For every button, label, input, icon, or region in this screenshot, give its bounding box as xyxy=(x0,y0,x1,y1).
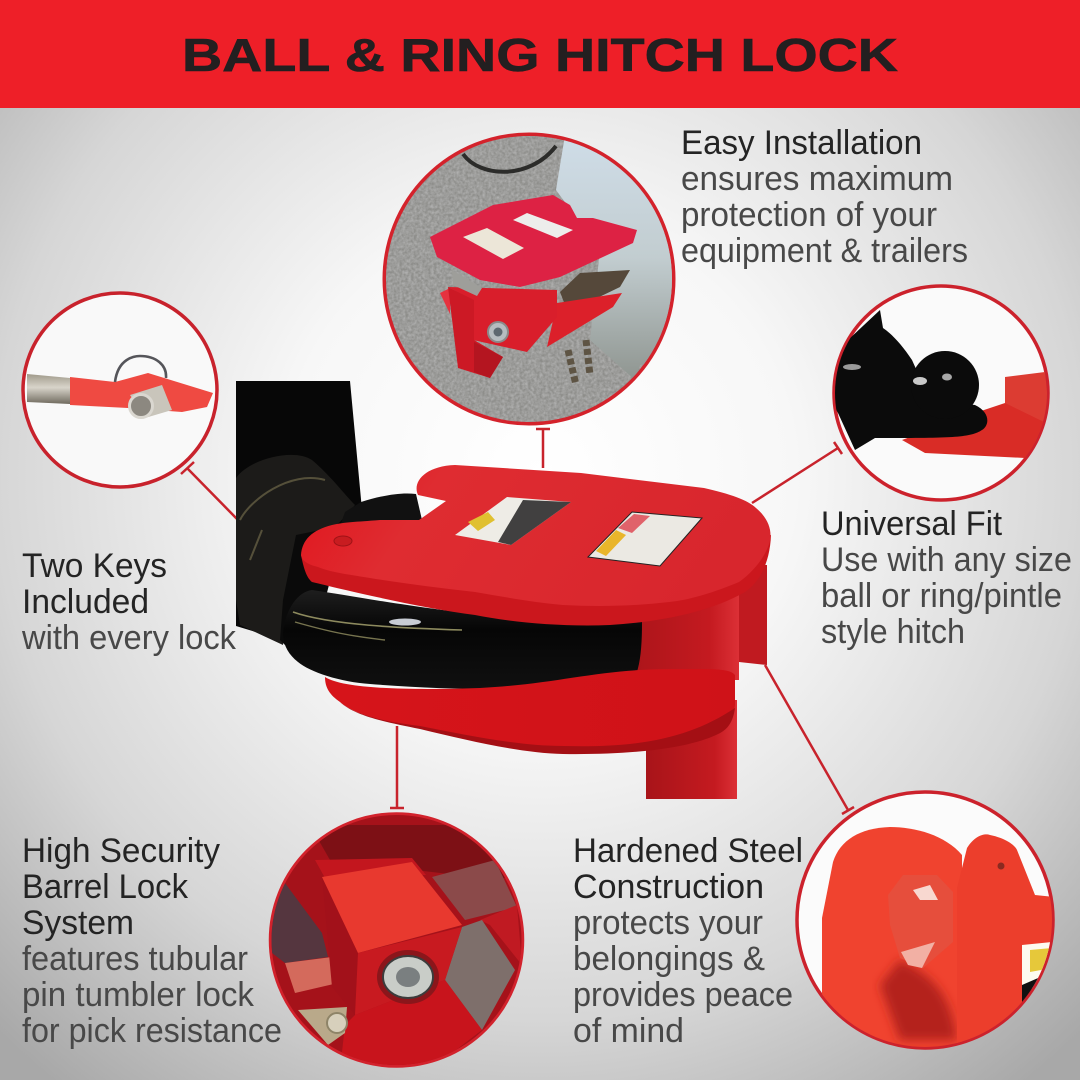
top plate edge xyxy=(301,535,771,625)
text: barrel lock: features tubular xyxy=(22,940,248,978)
text: hardened steel: Hardened Steel xyxy=(573,832,803,870)
text: barrel lock: for pick resistance xyxy=(22,1012,282,1050)
text: hardened steel xyxy=(573,832,803,1050)
rear post xyxy=(739,565,767,665)
hook coupler xyxy=(236,455,355,645)
text: two keys: with every lock xyxy=(21,619,237,657)
text: easy installation: protection of your xyxy=(681,196,937,234)
text: universal fit: ball or ring/pintle xyxy=(821,577,1062,615)
text: barrel lock: High Security xyxy=(22,832,220,870)
text: universal fit: Universal Fit xyxy=(821,505,1003,543)
connector lines xyxy=(181,429,854,814)
text: two keys: Included xyxy=(22,583,149,621)
text: barrel lock: pin tumbler lock xyxy=(22,976,255,1014)
text: easy installation: ensures maximum xyxy=(681,160,953,198)
black mount plate xyxy=(236,381,362,640)
black ring xyxy=(283,590,642,689)
callout: easy installation photo xyxy=(385,135,680,425)
main product: hitch lock xyxy=(236,381,771,799)
text: barrel lock xyxy=(22,832,282,1050)
text: hardened steel: of mind xyxy=(573,1012,684,1050)
text: easy installation xyxy=(681,124,968,270)
plate hole xyxy=(334,536,352,546)
text: hardened steel: belongings & xyxy=(573,940,765,978)
text: easy installation: equipment & trailers xyxy=(681,232,968,270)
top plate xyxy=(301,465,770,606)
brand label xyxy=(455,497,571,545)
callout: universal fit photo xyxy=(825,286,1050,500)
warning label xyxy=(588,512,702,566)
upper column xyxy=(620,590,739,680)
callout: hardened steel photo xyxy=(797,792,1055,1060)
text: hardened steel: provides peace xyxy=(573,976,793,1014)
text: two keys: Two Keys xyxy=(22,547,167,585)
callout: two keys photo xyxy=(23,293,217,487)
callout: barrel lock photo xyxy=(268,812,526,1070)
text: hardened steel: protects your xyxy=(573,904,763,942)
black ring upper xyxy=(340,493,422,526)
title banner xyxy=(0,0,1080,108)
title banner: BALL & RING HITCH LOCK xyxy=(182,29,898,81)
text: easy installation: Easy Installation xyxy=(681,124,922,162)
lower post xyxy=(646,700,737,799)
lower plate xyxy=(325,669,735,753)
text: barrel lock: Barrel Lock xyxy=(22,868,189,906)
text: universal fit: style hitch xyxy=(821,613,965,651)
text: barrel lock: System xyxy=(22,904,134,942)
text: hardened steel: Construction xyxy=(573,868,764,906)
text: universal fit xyxy=(821,505,1072,651)
text: universal fit: Use with any size xyxy=(821,541,1072,579)
text: two keys xyxy=(21,547,237,657)
hook to ring link xyxy=(280,525,345,650)
